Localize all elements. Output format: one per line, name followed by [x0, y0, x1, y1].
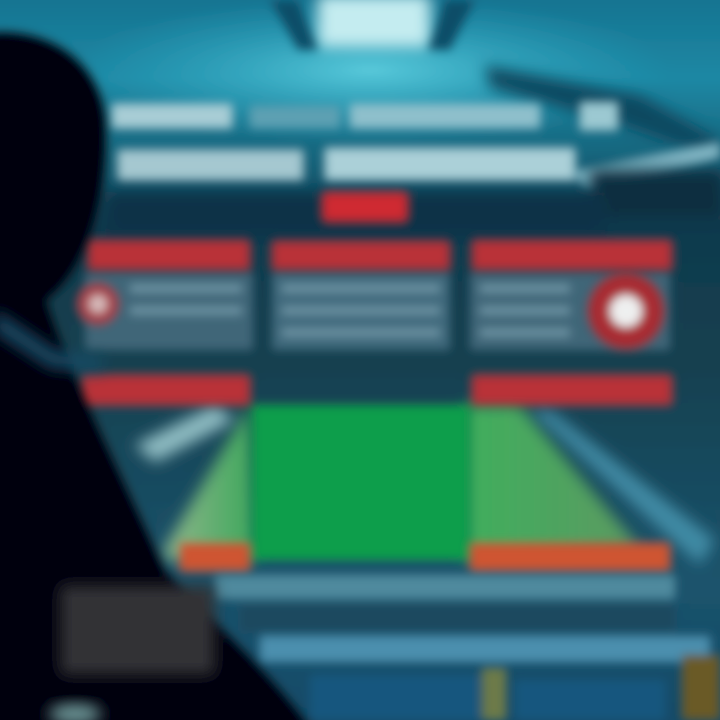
orange bar: bottom right	[470, 543, 670, 571]
orange bar: bottom left	[180, 543, 250, 571]
panel text rows	[130, 284, 570, 337]
stand stripe right	[530, 410, 715, 565]
header bar: right	[472, 240, 672, 270]
title: two blurred lines of heading	[112, 102, 618, 180]
pitch right side	[465, 405, 640, 560]
panel body: right	[470, 272, 670, 350]
icon: left round badge	[77, 283, 119, 325]
grey box over silhouette	[60, 585, 215, 675]
header bar: left	[88, 240, 250, 270]
red bar: pitch left	[82, 375, 250, 405]
panel: lower table rows	[215, 575, 720, 720]
icon: right round badge	[588, 273, 664, 349]
light spot bottom left	[49, 704, 101, 720]
ceiling with skylight and beams	[270, 0, 720, 220]
panel body: left	[85, 272, 253, 350]
ceiling glow	[70, 0, 670, 145]
panel: top row	[77, 240, 672, 350]
header bar: centre	[272, 241, 450, 270]
red bar: pitch right	[472, 375, 672, 405]
pitch centre	[252, 405, 470, 560]
panel body: centre	[272, 272, 450, 350]
badge: red label	[322, 192, 408, 222]
stand stripe left	[135, 405, 235, 462]
pitch left side	[165, 405, 255, 560]
dark band behind badge	[105, 192, 605, 234]
diagonal strip across shoulder	[0, 310, 105, 372]
panel: pitch	[82, 375, 715, 571]
silhouette: person in foreground	[0, 32, 312, 720]
